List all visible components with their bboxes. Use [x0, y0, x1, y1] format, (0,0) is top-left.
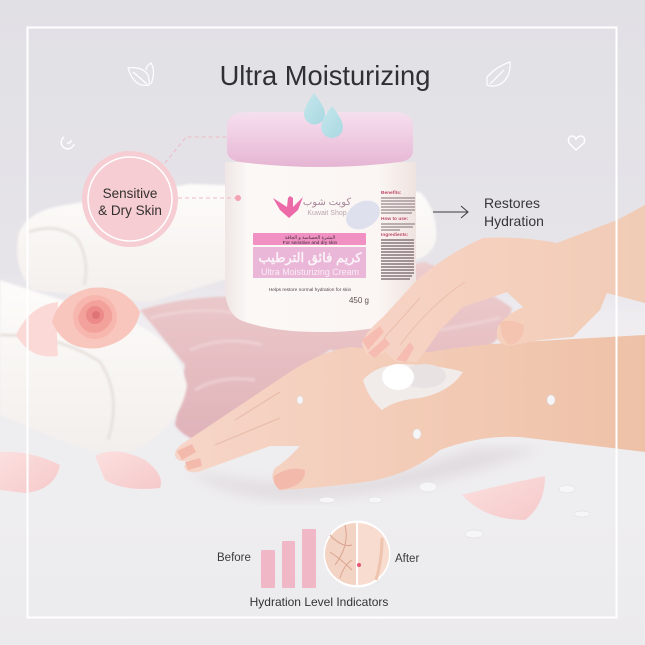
- before and after skin circle: [324, 520, 390, 588]
- jar side text: Benefits:: [381, 190, 402, 196]
- icon: heart: [568, 136, 585, 150]
- jar weight: 450 g: [349, 296, 369, 305]
- bar chart: [261, 529, 316, 588]
- jar logo: Kuwait Shop: [307, 210, 347, 217]
- jar logo: [273, 195, 385, 235]
- jar label band: البشرة الحساسة و الجافة: [285, 235, 335, 241]
- callout: sensitive and dry skin: & Dry Skin: [98, 203, 162, 218]
- jar lid: [227, 112, 413, 167]
- text: restores hydration: Hydration: [484, 213, 544, 229]
- jar logo: كويت شوب: [303, 197, 351, 208]
- icon: crescent: [61, 137, 74, 149]
- jar label band: For sensitive and dry skin: [283, 240, 338, 246]
- caption: Hydration Level Indicators: [250, 595, 388, 609]
- text: restores hydration: Restores: [484, 195, 540, 211]
- callout connector: dashed: [165, 137, 241, 201]
- jar side text: How to use:: [381, 216, 409, 222]
- callout: sensitive and dry skin: Sensitive: [103, 186, 157, 201]
- jar product name: كريم فائق الترطيب: [258, 250, 362, 266]
- petals: [0, 451, 545, 520]
- jar product name: [253, 247, 366, 278]
- icon: leaf right: [487, 62, 510, 86]
- label: after: After: [395, 553, 419, 565]
- callout: sensitive and dry skin: [82, 151, 178, 247]
- towel: top white: [17, 184, 436, 302]
- towel: bottom white: [0, 280, 187, 452]
- cream on hand: [363, 364, 463, 410]
- jar side text: [381, 190, 415, 279]
- icon: leaf left: [128, 63, 154, 85]
- rose: [16, 288, 140, 357]
- product jar: [225, 112, 416, 332]
- table shadows: [190, 448, 540, 500]
- water drops on table: [297, 395, 590, 538]
- jar product name: Ultra Moisturizing Cream: [261, 267, 359, 277]
- forearm and lower hand: [175, 335, 645, 490]
- title: Ultra Moisturizing: [220, 60, 430, 91]
- upper hand: [362, 205, 645, 362]
- jar side text: Ingredients:: [381, 232, 409, 238]
- towel: pink: [140, 262, 512, 445]
- jar label band: [253, 233, 366, 246]
- icon: water drops: [304, 93, 343, 138]
- label: before: Before: [217, 552, 251, 564]
- arrow: [433, 206, 468, 218]
- jar description: Helps restore normal hydration for skin: [269, 287, 352, 293]
- text: restores hydration: [484, 195, 544, 229]
